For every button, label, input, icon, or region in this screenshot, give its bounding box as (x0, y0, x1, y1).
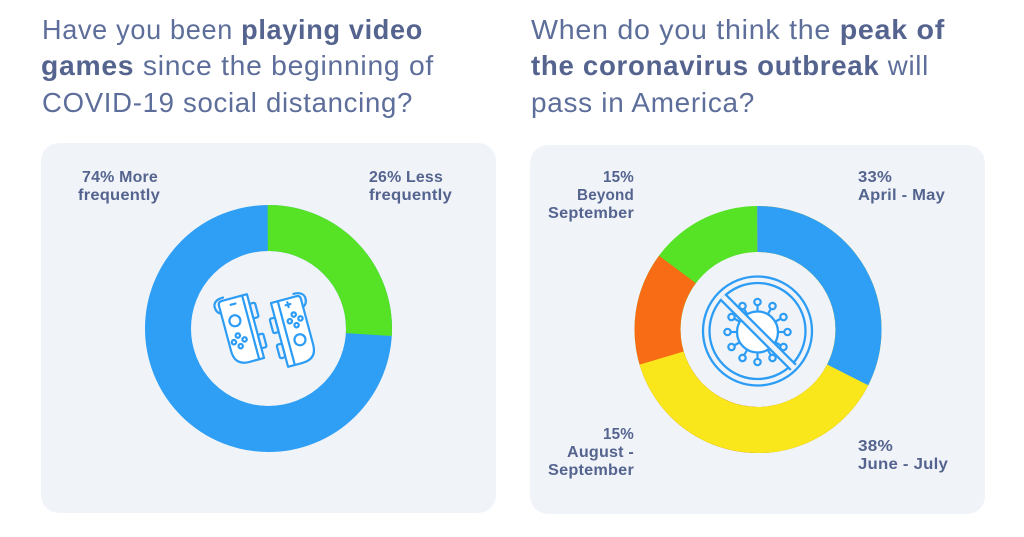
label: 33% April - May: April - May (858, 187, 945, 204)
heading: video games question: COVID-19 social distancing? (42, 87, 413, 118)
virus (724, 299, 791, 365)
label: 15% August - September: August - (567, 444, 634, 461)
heading: video games question (41, 14, 434, 118)
label: 38% June - July: 38% (858, 438, 893, 455)
label: 15% August - September: September (548, 462, 634, 479)
label: 15% beyond September: 15% (603, 169, 634, 186)
label: 33% April - May (858, 169, 945, 204)
panel: coronavirus peak (530, 145, 985, 514)
heading: coronavirus peak question: pass in America? (531, 87, 755, 118)
heading: video games question: Have you been playing video (42, 14, 423, 45)
label: 74% more frequently (78, 169, 160, 204)
label: 26% less frequently: 26% Less (369, 169, 443, 186)
label: 26% less frequently (369, 169, 452, 204)
label: 33% April - May: 33% (858, 169, 892, 186)
heading: coronavirus peak question (531, 14, 945, 118)
label: 15% beyond September: September (548, 205, 634, 222)
right controller (265, 291, 321, 368)
donut chart: video games (168, 228, 369, 429)
label: 26% less frequently: frequently (369, 187, 452, 204)
left controller (213, 290, 269, 367)
icon: crossed-out virus (703, 276, 812, 386)
donut chart: coronavirus peak (658, 229, 858, 430)
label: 15% August - September (548, 426, 634, 479)
heading: coronavirus peak question: the coronavirus outbreak will (531, 50, 929, 81)
label: 38% June - July: June - July (858, 456, 948, 473)
icon: game controllers (213, 290, 321, 368)
panel: video games (41, 143, 496, 513)
label: 38% June - July (858, 438, 948, 473)
slash (720, 294, 796, 370)
heading: video games question: games since the beginning of (41, 50, 434, 81)
label: 15% August - September: 15% (603, 426, 634, 443)
label: 15% beyond September (548, 169, 634, 222)
label: 74% more frequently: 74% More (82, 169, 158, 186)
label: 74% more frequently: frequently (78, 187, 160, 204)
label: 15% beyond September: Beyond (577, 187, 634, 204)
heading: coronavirus peak question: When do you think the peak of (531, 14, 945, 45)
